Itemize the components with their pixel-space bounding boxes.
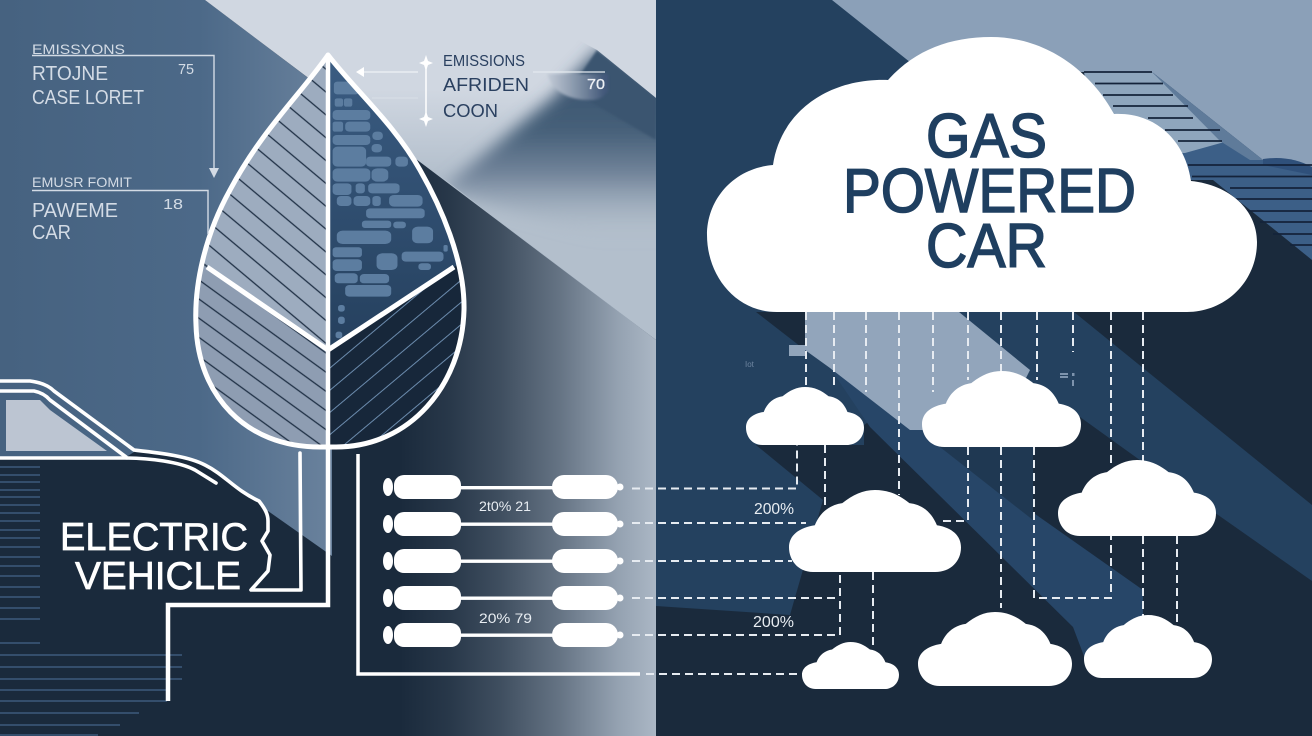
- text block: emissions lower left: [32, 174, 183, 244]
- icon: small cloud E: [802, 642, 899, 689]
- icon: small cloud B: [922, 371, 1081, 447]
- icon: electric car outline: [0, 381, 301, 736]
- value: 70: 70: [587, 76, 605, 93]
- arrow: upper left label bracket: [32, 56, 219, 178]
- label: tiny note: Iot: [745, 360, 755, 369]
- heading: gas powered car: [843, 102, 1136, 281]
- text block: emissions upper left: [32, 41, 194, 109]
- heading: electric vehicle: ELECTRIC: [60, 516, 248, 559]
- text block: emissions upper right: EMISSIONS: [443, 53, 525, 70]
- stripes: stepped building behind main cloud: [1084, 72, 1312, 260]
- connectors: dashed lines between pills and clouds: [632, 312, 1177, 674]
- text block: emissions upper left: RTOJNE: [32, 63, 108, 85]
- label: 200 percent lower: 200%: [753, 614, 794, 631]
- heading: electric vehicle: VEHICLE: [75, 555, 241, 598]
- icon: split leaf: [193, 52, 467, 450]
- panel: electric vehicle background: [0, 0, 680, 736]
- text block: emissions upper left: 75: [178, 61, 194, 78]
- text block: emissions lower left: 18: [163, 196, 183, 213]
- icon: main cloud: [707, 37, 1257, 312]
- label: pill value lower: 20% 79: [479, 610, 532, 626]
- text block: emissions upper right: [443, 53, 529, 121]
- label: pill value upper: 2t0% 21: [479, 498, 531, 514]
- text block: emissions upper right: COON: [443, 101, 498, 121]
- callout: upper right bracket with sparkles: [356, 55, 605, 127]
- icon: small cloud D: [789, 490, 961, 572]
- horizontal stripes: lower left: [0, 467, 182, 735]
- heading: gas powered car: GAS: [926, 102, 1047, 171]
- icon: small cloud C: [1058, 460, 1216, 536]
- icon: small cloud F: [918, 612, 1072, 686]
- heading: gas powered car: POWERED: [843, 157, 1136, 226]
- text block: emissions upper left: CASE LORET: [32, 87, 144, 109]
- text block: emissions upper right: AFRIDEN: [443, 75, 529, 95]
- text block: emissions upper left: EMISSYONS: [32, 41, 125, 57]
- text block: emissions lower left: PAWEME: [32, 200, 118, 222]
- icon: small cloud G: [1084, 615, 1212, 678]
- panel: gas car background: [656, 0, 1312, 736]
- label: 200 percent upper: 200%: [754, 501, 794, 518]
- connector: lower right line to clouds: [358, 454, 640, 674]
- heading: electric vehicle: [60, 516, 248, 598]
- text block: emissions lower left: EMUSR FOMIT: [32, 174, 132, 190]
- text block: emissions lower left: CAR: [32, 222, 71, 244]
- icon: tiny marks: [1060, 373, 1074, 386]
- connector: lower left label bracket: [32, 190, 208, 234]
- connector: leaf stem to lower left: [168, 55, 328, 701]
- icon: small cloud A: [746, 387, 864, 445]
- heading: gas powered car: CAR: [926, 212, 1047, 281]
- chart: battery pill rows: [383, 475, 624, 647]
